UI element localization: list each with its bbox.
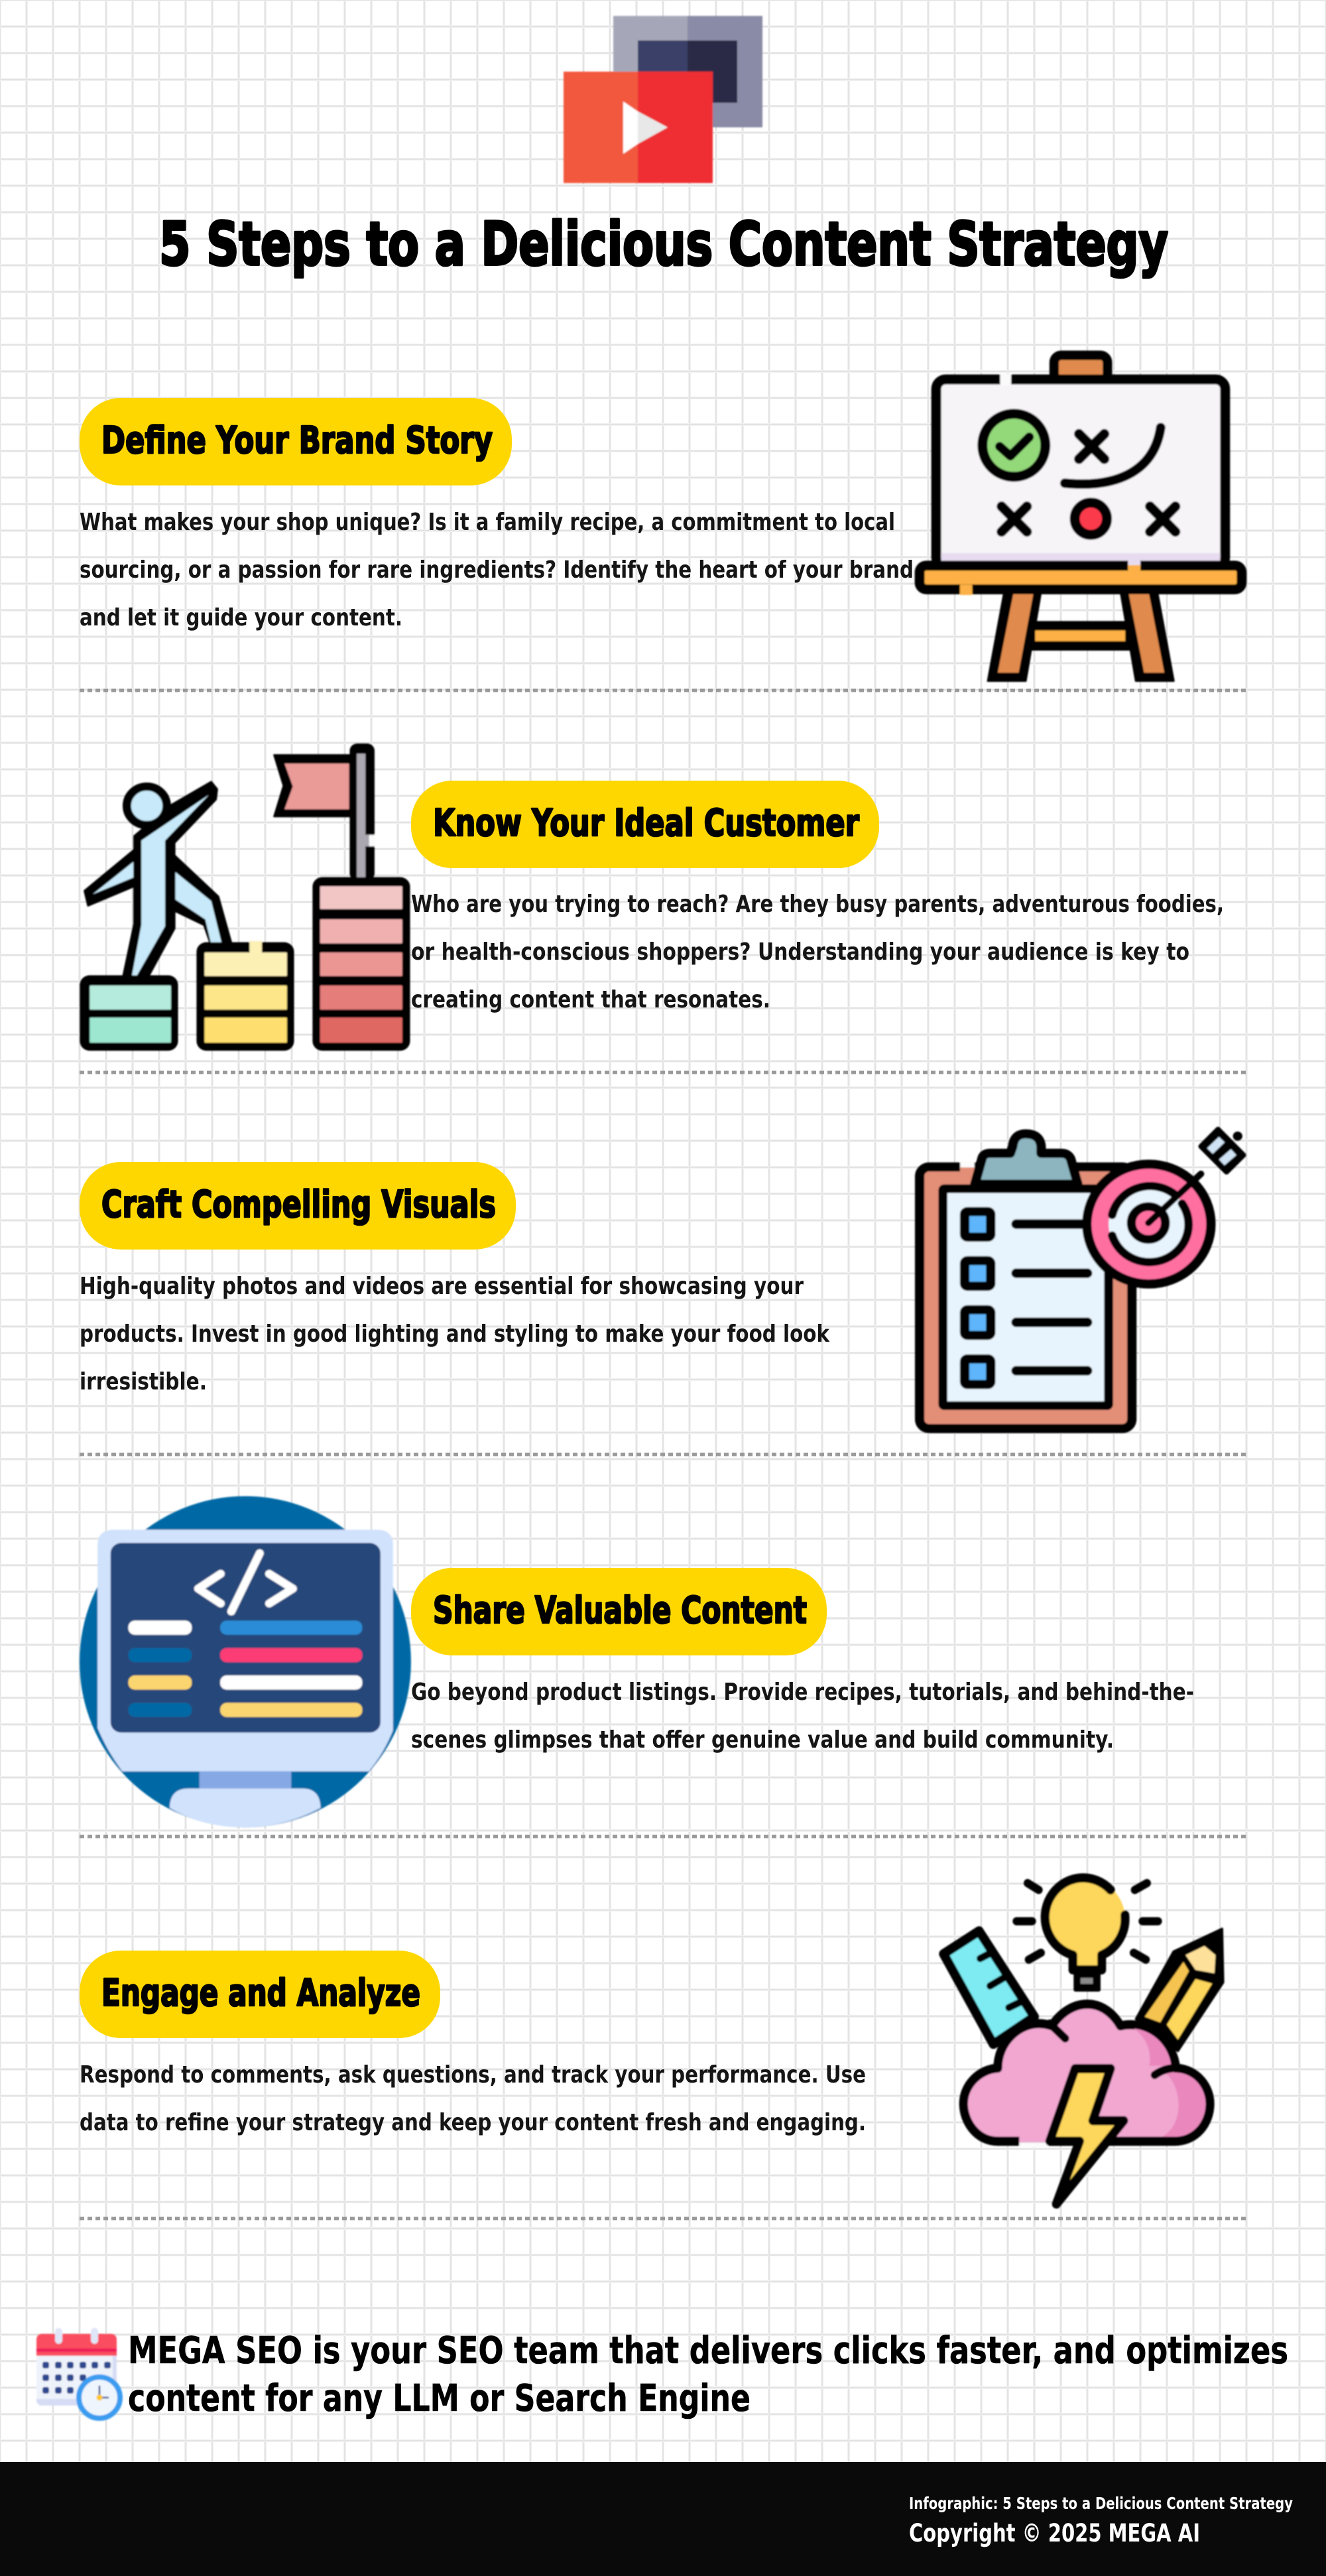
dotted dividers: [80, 690, 1246, 2219]
text block: ideal customer: [411, 891, 1224, 1013]
icon: calendar with clock: [36, 2328, 120, 2418]
heading pill: define your brand story: Define Your Brand Story: [101, 419, 493, 462]
icon: monitor with code: [80, 1496, 411, 1827]
icon: figure climbing steps to flag: [80, 743, 410, 1051]
footer band: [0, 2462, 1326, 2576]
call to action text: content for any LLM or Search Engine: [128, 2377, 751, 2420]
icon: strategy easel: [920, 355, 1242, 681]
call to action text: [128, 2329, 1288, 2420]
text block: brand story: and let it guide your content.: [80, 604, 402, 631]
panel: define your brand story: [80, 355, 1242, 681]
text block: compelling visuals: products. Invest in good lighting and styling to make your food look: [80, 1320, 830, 1348]
text block: ideal customer: or health-conscious shoppers? Understanding your audience is key to: [411, 938, 1189, 966]
heading pill: know your ideal customer: Know Your Ideal Customer: [433, 802, 859, 845]
text block: valuable content: [411, 1679, 1194, 1754]
footer credit text: Copyright © 2025 MEGA AI: [909, 2519, 1200, 2547]
text block: compelling visuals: irresistible.: [80, 1368, 207, 1395]
heading pill: know your ideal customer: [411, 781, 879, 868]
text block: brand story: [80, 509, 914, 631]
text block: engage and analyze: [80, 2061, 866, 2136]
heading pill: share valuable content: Share Valuable Content: [433, 1589, 807, 1632]
panel: share valuable content: [80, 1496, 1194, 1827]
text block: brand story: What makes your shop unique? Is it a family recipe, a commitment to local: [80, 509, 895, 536]
text block: compelling visuals: [80, 1273, 830, 1395]
text block: engage and analyze: Respond to comments, ask questions, and track your performance. Use: [80, 2061, 866, 2089]
panel: know your ideal customer: [80, 743, 1224, 1051]
text block: compelling visuals: High-quality photos and videos are essential for showcasing your: [80, 1273, 804, 1300]
heading pill: engage and analyze: [80, 1951, 440, 2038]
heading pill: craft compelling visuals: [80, 1162, 516, 1250]
text block: brand story: sourcing, or a passion for rare ingredients? Identify the heart of your brand: [80, 556, 914, 584]
text block: valuable content: scenes glimpses that offer genuine value and build community.: [411, 1726, 1114, 1754]
text block: ideal customer: creating content that resonates.: [411, 986, 770, 1013]
icon: clipboard with target: [920, 1129, 1244, 1429]
heading pill: craft compelling visuals: Craft Compelling Visuals: [101, 1183, 496, 1226]
panel: craft compelling visuals: [80, 1129, 1244, 1429]
heading pill: share valuable content: [411, 1568, 827, 1655]
panel: engage and analyze: [80, 1878, 1223, 2204]
heading pill: engage and analyze: Engage and Analyze: [101, 1972, 420, 2015]
heading pill: define your brand story: [80, 398, 512, 485]
text block: engage and analyze: data to refine your strategy and keep your content fresh and engaging.: [80, 2109, 866, 2136]
logo: play squares: [564, 16, 762, 183]
icon: idea cloud with bulb, ruler and pencil: [943, 1878, 1223, 2204]
footer credit text: [909, 2494, 1293, 2547]
